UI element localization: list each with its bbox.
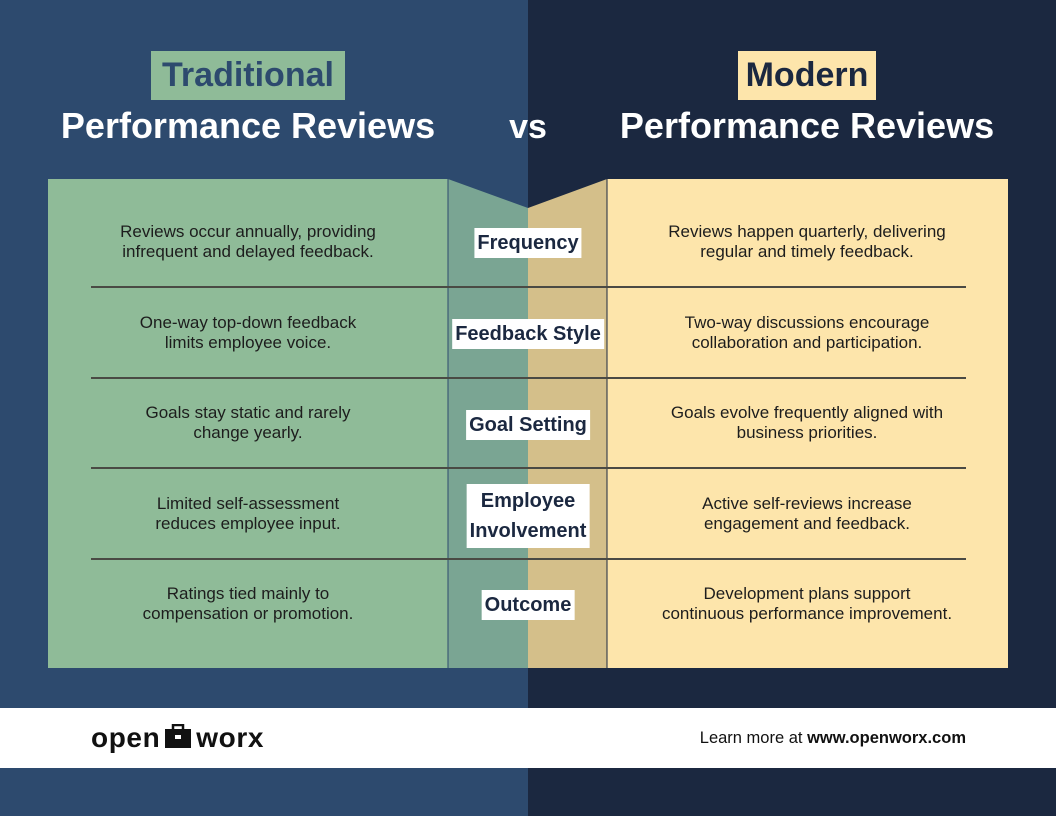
comparison table: Goal Setting <box>469 414 587 436</box>
highlight: Traditional <box>151 51 345 100</box>
comparison table: Involvement <box>470 520 586 542</box>
vs: vs <box>509 108 547 146</box>
row: feedback style: limits employee voice. <box>165 333 331 352</box>
row: goal setting <box>145 403 351 442</box>
row: employee involvement <box>155 494 341 533</box>
comparison table: Goals evolve frequently aligned with <box>671 403 943 422</box>
footer link: Learn more at www.openworx.com <box>700 729 966 747</box>
highlight: Traditional: Traditional <box>162 56 334 94</box>
subtitle left: Performance Reviews <box>61 105 435 146</box>
comparison table: Employee <box>481 490 575 512</box>
comparison table: Active self-reviews increase <box>702 494 912 513</box>
comparison table: Outcome <box>485 594 571 616</box>
comparison table: Two-way discussions encourage <box>685 313 929 332</box>
title: modern <box>620 51 994 146</box>
subtitle right: Performance Reviews <box>620 105 994 146</box>
comparison table: collaboration and participation. <box>692 333 922 352</box>
footer <box>0 708 1056 768</box>
highlight: Modern <box>738 51 876 100</box>
comparison table: regular and timely feedback. <box>700 242 914 261</box>
comparison table: Feedback Style <box>455 323 601 345</box>
row: feedback style: One-way top-down feedback <box>140 313 356 332</box>
comparison table: Development plans support <box>704 584 910 603</box>
row: frequency: Reviews occur annually, providing <box>120 222 376 241</box>
logo: open worx <box>91 722 264 753</box>
row: goal setting: Goals stay static and rarely <box>145 403 351 422</box>
comparison table: Reviews happen quarterly, delivering <box>668 222 946 241</box>
row: goal setting: change yearly. <box>193 423 303 442</box>
highlight: Modern: Modern <box>746 56 868 94</box>
comparison table <box>48 179 1008 668</box>
comparison table: engagement and feedback. <box>704 514 910 533</box>
row: outcome: Ratings tied mainly to <box>167 584 329 603</box>
row: feedback style <box>140 313 356 352</box>
comparison table: Frequency <box>477 232 579 254</box>
row: frequency: infrequent and delayed feedback. <box>122 242 374 261</box>
row: outcome: compensation or promotion. <box>143 604 353 623</box>
comparison table: continuous performance improvement. <box>662 604 952 623</box>
row: employee involvement: reduces employee input. <box>155 514 341 533</box>
row: employee involvement: Limited self-assessment <box>157 494 339 513</box>
row: frequency <box>120 222 376 261</box>
title: traditional <box>61 51 435 146</box>
comparison table: business priorities. <box>737 423 877 442</box>
row: outcome <box>143 584 353 623</box>
